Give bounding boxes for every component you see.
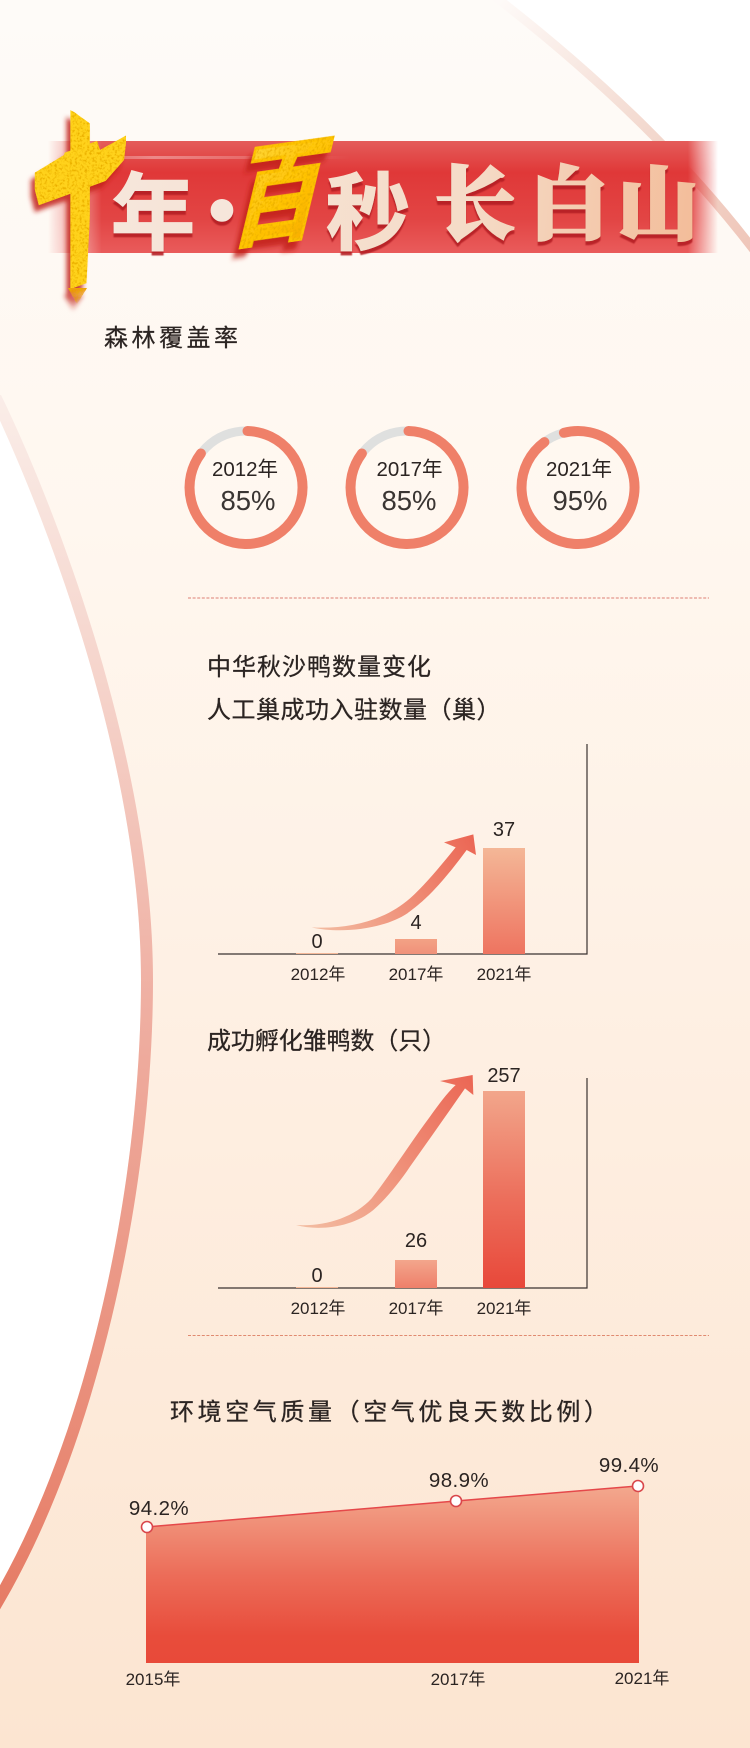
value labels: 4 bbox=[410, 912, 422, 934]
donut: 2021 bbox=[522, 431, 635, 544]
area chart bbox=[142, 1480, 644, 1663]
value labels bbox=[311, 819, 515, 953]
donut: 2012: 2012年 bbox=[212, 458, 278, 481]
value labels: 0 bbox=[311, 1265, 323, 1287]
arrow: growth trend bbox=[296, 1075, 473, 1228]
year labels: 2021年 bbox=[615, 1669, 669, 1688]
year labels: 2017年 bbox=[389, 965, 443, 984]
year labels: 2017年 bbox=[431, 1670, 485, 1689]
year labels: 2015年 bbox=[126, 1670, 180, 1689]
title character: 十: 十 bbox=[34, 52, 126, 320]
heading: artificial nests: 人工巢成功入驻数量（巢） bbox=[207, 697, 501, 724]
donut: 2021: 95% bbox=[552, 485, 608, 516]
value labels: 26 bbox=[405, 1230, 427, 1252]
donut: 2012 bbox=[190, 431, 303, 544]
year labels: 2021年 bbox=[477, 1299, 531, 1318]
donut: 2017 bbox=[350, 431, 464, 544]
value labels: 94.2% bbox=[129, 1497, 189, 1520]
heading: hatched ducklings: 成功孵化雏鸭数（只） bbox=[207, 1028, 446, 1055]
donut: 2017: 2017年 bbox=[376, 458, 443, 481]
title character: 秒: 秒 bbox=[326, 167, 410, 261]
value labels: 0 bbox=[311, 931, 323, 953]
year labels: 2012年 bbox=[291, 1299, 345, 1318]
value labels: 98.9% bbox=[429, 1469, 489, 1492]
donut: 2012: 85% bbox=[220, 485, 276, 516]
value labels: 99.4% bbox=[599, 1454, 659, 1477]
chart axes bbox=[218, 1078, 587, 1288]
year labels: 2017年 bbox=[389, 1299, 443, 1318]
donut: 2017: 85% bbox=[381, 485, 437, 516]
value labels: 37 bbox=[493, 819, 515, 841]
title character: 百: 百 bbox=[223, 125, 341, 263]
bars bbox=[296, 848, 525, 954]
year labels: 2021年 bbox=[477, 965, 531, 984]
donut: 2021: 2021年 bbox=[546, 458, 612, 481]
heading: merganser count change: 中华秋沙鸭数量变化 bbox=[207, 654, 432, 681]
year labels bbox=[291, 965, 531, 984]
title: 长白山: 长白山 bbox=[435, 163, 698, 251]
section: merganser nest chart bbox=[207, 654, 587, 984]
chart axes bbox=[218, 744, 587, 954]
value labels bbox=[129, 1454, 659, 1520]
value labels bbox=[311, 1065, 521, 1287]
title character: 年: 年 bbox=[111, 167, 195, 261]
year labels: 2012年 bbox=[291, 965, 345, 984]
title separator dot: · bbox=[199, 133, 245, 288]
year labels bbox=[126, 1669, 669, 1689]
banner ribbon bbox=[48, 141, 718, 253]
title banner bbox=[34, 52, 718, 320]
section: ducklings chart bbox=[207, 1028, 587, 1318]
bars bbox=[296, 1091, 525, 1288]
value labels: 257 bbox=[487, 1065, 521, 1087]
section: air quality bbox=[126, 1399, 669, 1689]
arrow: growth trend bbox=[312, 834, 476, 930]
year labels bbox=[291, 1299, 531, 1318]
heading: forest coverage: 森林覆盖率 bbox=[104, 325, 242, 352]
section: forest coverage bbox=[104, 325, 635, 544]
heading: air quality: 环境空气质量（空气优良天数比例） bbox=[170, 1399, 612, 1426]
